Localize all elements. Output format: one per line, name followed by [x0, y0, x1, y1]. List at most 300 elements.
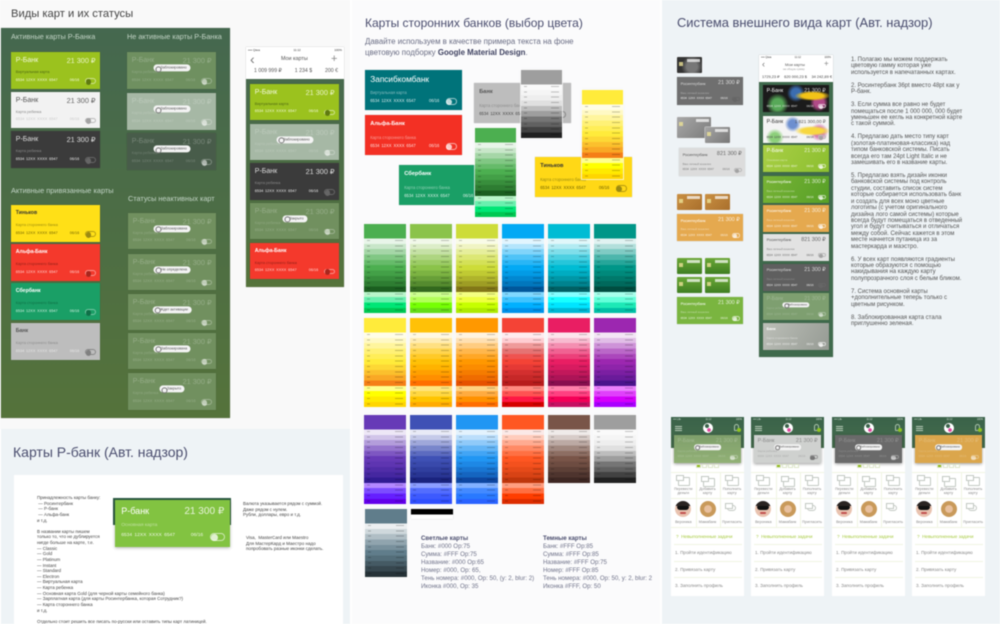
label: inactive statuses: Статусы неактивных карт — [128, 194, 215, 203]
card: generic bank: 6534 12XX XXXX 6547 — [479, 111, 525, 116]
card: main R-bank — [115, 500, 230, 547]
label: top up: карту — [807, 491, 817, 495]
text: numbered notes: полупрозрачного слоя с белым бликом. — [851, 276, 961, 282]
card: Sberbank: 06/16 — [463, 193, 473, 198]
totals — [762, 74, 832, 79]
text: dark cards spec: Иконка #FFF, Op: 50 — [543, 583, 601, 590]
card: blocked dark: 6534 12XX XXXX 6547 — [132, 159, 174, 163]
icon: invite — [727, 505, 736, 511]
card: Tinkoff — [535, 157, 632, 197]
card: status blocked: Заблокирована — [161, 226, 187, 230]
swatch: orange — [456, 318, 498, 407]
text: numbered notes: 7. Система основной карты — [851, 289, 928, 295]
card: black art: 06/16 — [807, 104, 814, 108]
swatch: purple — [594, 318, 636, 407]
card: status blocked 2: Карта ребенка — [133, 351, 158, 355]
card: status closed: Закрыто — [167, 387, 181, 391]
label: linked cards: Активные привязанные карты — [11, 186, 114, 195]
text: currency note — [242, 501, 322, 518]
action grid — [832, 472, 905, 528]
card: gold Rosinterbank — [763, 205, 829, 232]
label: transfer — [914, 487, 934, 495]
text: light cards spec: Банк: #000 Op:75 — [421, 543, 470, 550]
swatch: grey — [594, 415, 636, 483]
card: lime: 6534 12XX XXXX 6547 — [255, 109, 297, 113]
card: active lime: 21 300 ₽ — [67, 56, 96, 65]
text: card naming rules: — Карта ребенка — [37, 585, 73, 590]
swatch: light blue — [502, 224, 544, 313]
header — [912, 417, 985, 448]
card: status undefined: 21 300 ₽ — [183, 258, 212, 267]
card: lime: Виртуальная карта — [255, 102, 288, 106]
card: Alfa: Альфа-Банк — [16, 249, 48, 255]
card: blocked dark: Карта ребенка — [132, 151, 157, 155]
card: generic bank: Банк — [16, 328, 28, 334]
icon: add card — [783, 478, 795, 487]
text: light cards spec: Номер: #000, Op: 65, — [421, 567, 481, 574]
label: add card: карту — [944, 491, 953, 495]
status bar: 11:12 — [293, 48, 301, 52]
card: 06/16 — [959, 454, 966, 458]
text: card naming rules: — Карта стороннего банка — [37, 602, 93, 607]
card: gold Rosinterbank: 6534 12XX XXXX 6547 — [681, 233, 712, 237]
back chevron: ‹ — [762, 59, 765, 69]
label: Veronika: Вероника — [755, 520, 772, 524]
swatch grid: material palettes — [363, 223, 637, 578]
card: light grey: Росинтербанк — [767, 238, 791, 242]
header: 100% — [897, 418, 903, 420]
header: •••• Life — [753, 418, 761, 420]
text: numbered notes: уменьшен ее кегль на конкретной карте — [851, 115, 962, 121]
label: top up: Пополнить — [723, 487, 741, 491]
card: Карта ребенка — [758, 449, 777, 453]
card: Sberbank — [399, 165, 496, 205]
card: closed: Карта ребенка — [255, 221, 280, 225]
text: light cards spec: Тень номера: #000, Op: 50, (y: 2, blur: 2) — [421, 575, 534, 582]
card: active dark: 06/16 — [70, 157, 79, 161]
card: 6534 12XX XXXX 6547 — [758, 454, 789, 458]
card: status blocked 2: 06/16 — [186, 358, 196, 362]
card: Zapsibkombank: Запсибкомбанк — [370, 75, 429, 84]
card: dark — [250, 163, 339, 200]
panel: card appearance system — [662, 0, 1000, 624]
header: 100% — [736, 418, 742, 420]
card: Заблокировано — [699, 445, 719, 449]
label: Mamabank: Мамабанк — [860, 520, 877, 524]
text: dark cards spec: Сумма: #FFF Op:85 — [543, 551, 599, 558]
text: dark cards spec: Название: #FFF Op:75 — [543, 559, 607, 566]
card: Alfa: 6534 12XX XXXX 6547 — [255, 268, 297, 272]
card: light grey Rosinterbank: Росинтербанк — [683, 152, 708, 157]
text: currency note: Валюта указывается рядом с суммой. — [243, 501, 322, 506]
card: lime gradient: 21 300 ₽ — [804, 148, 826, 154]
text: numbered notes: мастеркарда и маэстро. — [851, 244, 918, 250]
card: green Rosinterbank: 6534 12XX XXXX 6547 — [767, 195, 797, 199]
card: dark grey: 21 300 ₽ — [804, 267, 826, 273]
label: add card: Добавить — [860, 487, 877, 491]
swatch: grey small — [521, 70, 562, 138]
card: blocked green: 06/16 — [186, 78, 195, 82]
card: Alfa — [11, 244, 100, 281]
phone header — [246, 47, 344, 79]
text: card naming rules: — Виртуальная карта — [37, 579, 83, 584]
card: blocked light: Заблокировано — [160, 107, 187, 111]
card: status blocked 2: 21 300 ₽ — [183, 337, 212, 346]
task 2: 2. Привязать карту — [836, 567, 876, 572]
card: Alfa — [365, 115, 462, 155]
icon: top up — [807, 477, 819, 486]
label: invite: Пригласить — [963, 520, 983, 524]
add button: + — [824, 59, 829, 68]
text: numbered notes: используется в напечатанных картах. — [851, 70, 956, 76]
label: top up: карту — [888, 491, 898, 495]
panel: R-bank cards — [1, 429, 350, 624]
text: numbered notes: студии, составить список систем — [851, 186, 942, 192]
label: add card: Добавить — [779, 487, 796, 491]
label: Veronika: Вероника — [836, 520, 853, 524]
icon: add card — [703, 478, 715, 487]
totals: 1729,23 ₽ — [762, 74, 780, 79]
card: gold Rosinterbank: 21 300 ₽ — [718, 217, 740, 223]
task 1: 1. Пройти идентификацию — [675, 550, 732, 555]
card: light grey Rosinterbank — [679, 148, 745, 176]
icon: transfer — [678, 477, 690, 486]
avatar: Veronika — [675, 501, 691, 517]
card: main R-bank: 06/16 — [191, 533, 203, 538]
card: light grey Rosinterbank: Ваш личный кошелек — [683, 162, 711, 166]
swatch: green small — [475, 128, 516, 217]
card: green Rosinterbank: 06/16 — [721, 316, 728, 320]
card: active white: 21 300 ₽ — [67, 96, 96, 105]
card: dark: Карта ребенка — [255, 181, 280, 185]
card: grey Rosinterbank: 06/16 — [721, 96, 728, 100]
card: blocked: 6534 12XX XXXX 6547 — [255, 149, 297, 153]
card: Zapsibkombank — [365, 70, 462, 110]
card: lime gradient: 6534 12XX XXXX 6547 — [767, 164, 797, 168]
tasks heading: ? Невыполненные задачи — [917, 534, 973, 539]
swatch: red — [502, 318, 544, 407]
card: green Rosinterbank: Росинтербанк — [681, 301, 706, 306]
card: black art: 21 300 ₽ — [804, 88, 826, 94]
card: active white: Карта ребенка — [16, 110, 41, 114]
card: 21 300 ₽ — [877, 438, 899, 444]
action grid — [671, 472, 744, 528]
card: Tinkoff — [11, 205, 100, 242]
label: add card: карту — [703, 491, 712, 495]
card: grey bank: 06/16 — [807, 342, 814, 346]
text: numbered notes: и создать для всех моно цветные — [851, 199, 944, 205]
header: 100% — [977, 418, 983, 420]
phone: home screen, gold card — [912, 417, 985, 596]
header: 11:12 — [785, 418, 791, 420]
card: status awaiting activation: Р-Банк — [133, 299, 155, 306]
card: white art: 06/16 — [807, 135, 814, 139]
card: active lime: Виртуальная карта — [16, 70, 49, 74]
totals: 1 009 999 ₽ — [254, 68, 282, 74]
label: top up: карту — [968, 491, 978, 495]
card: blocked light: 06/16 — [186, 119, 195, 123]
text: numbered notes: которые собирается использовать банк — [851, 192, 961, 198]
text: numbered notes — [850, 56, 962, 327]
text: dark cards spec: Банк: #FFF Op:85 — [543, 543, 593, 550]
card: status closed: 6534 12XX XXXX 6547 — [133, 399, 175, 403]
text: numbered notes: дизайна лого самой системы) которые — [851, 212, 959, 218]
card: generic bank: 6534 12XX XXXX 6547 — [16, 349, 58, 353]
card: main R-bank: 6534 12XX XXXX 6547 — [121, 533, 175, 538]
text: numbered notes: логотипы (с учетом оригинального — [851, 205, 947, 211]
text: card naming rules: — Classic — [37, 546, 57, 551]
card: blocked: Карта ребенка — [767, 306, 785, 310]
pager dots — [696, 464, 720, 468]
card: status awaiting activation — [128, 294, 216, 330]
text: numbered notes: типом банковской системы. Писать — [851, 147, 950, 153]
swatch: deep purple — [364, 415, 406, 504]
label: top up — [964, 487, 982, 496]
card: blocked — [763, 293, 829, 320]
header — [751, 417, 824, 448]
label: add card — [698, 486, 716, 496]
card: blocked: 21 300 ₽ — [306, 128, 335, 137]
card: generic bank — [11, 323, 100, 360]
card: dark: 21 300 ₽ — [306, 167, 335, 176]
header: 100% — [816, 418, 822, 420]
card: Alfa: 6534 12XX XXXX 6547 — [16, 270, 58, 274]
card: blocked: Р-Банк — [767, 296, 783, 302]
intro text: цветовую подборку Google Material Design. — [365, 48, 528, 56]
card: status closed — [128, 373, 216, 410]
card: Sberbank: 6534 12XX XXXX 6547 — [16, 309, 58, 313]
card: blocked: Заблокировано — [283, 137, 310, 141]
card: blocked green: Карта ребенка — [132, 70, 157, 74]
action grid — [912, 472, 985, 528]
swatch: cyan — [548, 224, 590, 313]
card: blocked: 6534 12XX XXXX 6547 — [767, 312, 797, 316]
card: gold Rosinterbank: Росинтербанк — [681, 218, 706, 223]
card: Tinkoff: Тиньков — [16, 210, 37, 216]
card: status undefined: Карта ребенка — [133, 272, 158, 276]
task 1: 1. Пройти идентификацию — [836, 550, 893, 555]
card: gold Rosinterbank: 06/16 — [721, 233, 728, 237]
card: 21 300 ₽ — [957, 438, 979, 444]
card: 06/16 — [798, 454, 805, 458]
swatch: green — [364, 224, 406, 313]
icon: top up — [888, 477, 900, 486]
card: blocked green: 6534 12XX XXXX 6547 — [132, 78, 174, 82]
label: transfer: Перевести — [754, 487, 772, 491]
card: grey Rosinterbank: Росинтербанк — [681, 81, 706, 86]
bank card gold 2 — [705, 194, 730, 210]
card: black art: Р-Банк — [767, 88, 783, 94]
mini card: black — [677, 57, 702, 73]
screen title: Мои карты — [785, 62, 805, 67]
label: transfer: деньги — [678, 491, 689, 495]
text: light cards spec: Название: #000 Op:65 — [421, 559, 484, 566]
card: status awaiting activation: Ждет активации — [160, 307, 188, 311]
card: status closed: Р-Банк — [133, 378, 155, 385]
text: numbered notes: цветовую гамму которая уже — [851, 63, 931, 69]
card: grey bank: 6534 12XX XXXX 6547 — [767, 342, 797, 346]
card: Карта ребенка — [919, 449, 938, 453]
card: status closed: Карта ребенка — [133, 391, 158, 395]
card: blocked: 06/16 — [807, 312, 814, 316]
text: card naming rules: — Росинтербанк — [38, 501, 73, 506]
tasks list — [915, 534, 983, 588]
card: active lime: Р-Банк — [16, 57, 38, 64]
label: active cards: Активные карты Р-Банка — [11, 32, 95, 41]
card: lime: 21 300 ₽ — [306, 88, 335, 97]
card: Tinkoff: 6534 12XX XXXX 6547 — [540, 185, 586, 190]
text: card naming rules: — Standard — [37, 568, 61, 573]
icon: invite — [807, 505, 816, 511]
card — [674, 435, 741, 463]
card: Sberbank: Карта стороннего банка — [16, 301, 58, 305]
card: Р-Банк — [678, 438, 694, 444]
status bar: 100% — [824, 56, 831, 59]
icon: transfer — [839, 477, 851, 486]
card: black art — [763, 85, 829, 112]
label: inactive cards: Не активные карты Р-Банка — [127, 32, 222, 41]
text: numbered notes: 4. Предлагаю дать место типу карт — [851, 134, 949, 140]
card: dark grey: 06/16 — [807, 283, 814, 287]
card: light grey: 821 300 ₽ — [801, 237, 826, 243]
card — [754, 435, 821, 463]
avatar: Mamabank — [941, 501, 957, 517]
back chevron: ‹ — [250, 51, 255, 67]
text: numbered notes: помещаться после 1 000 000, 000 будет — [851, 108, 962, 114]
card: Alfa: Альфа-Банк — [370, 121, 405, 127]
card: light grey — [763, 234, 829, 261]
card: dark: 06/16 — [309, 189, 318, 193]
label: top up: Пополнить — [884, 487, 902, 491]
swatch: yellow small — [582, 90, 623, 179]
text: numbered notes: которые образуются с помощью — [851, 263, 941, 269]
card: status blocked — [128, 213, 216, 249]
card: generic bank: 06/16 — [538, 111, 548, 116]
card: status undefined: Не определена — [161, 267, 187, 271]
card: Р-Банк — [839, 438, 855, 444]
text: dark cards spec: Темные карты — [543, 535, 587, 542]
label: transfer: деньги — [838, 491, 850, 495]
card: blocked light: 6534 12XX XXXX 6547 — [132, 119, 174, 123]
card: Alfa: Карта стороннего банка — [370, 135, 416, 140]
card: main R-bank: Основная карта — [121, 523, 157, 528]
card: grey Rosinterbank: Ваш личный кошелек — [681, 91, 709, 95]
task 2: 2. Привязать карту — [675, 567, 715, 572]
card: status undefined — [128, 254, 216, 290]
totals — [254, 67, 338, 74]
bank card grey small — [705, 127, 730, 143]
task 3: 3. Заполнить профиль — [916, 583, 964, 588]
card: lime gradient — [763, 145, 829, 172]
tasks heading: ? Невыполненные задачи — [676, 534, 732, 539]
card: blocked green — [127, 52, 216, 89]
tasks list — [754, 534, 822, 588]
card: 06/16 — [718, 454, 725, 458]
card: white art: 1 821 300,00 ₽ — [795, 119, 826, 124]
text: numbered notes: всегда будут помещаться в отведенный — [851, 218, 962, 224]
swatch: blue grey — [365, 509, 407, 577]
card: closed: Закрыто — [289, 216, 304, 220]
text: numbered notes: замешивать его в название карты. — [851, 160, 947, 166]
text: numbered notes: +дополнительные теперь только с — [851, 295, 947, 301]
card: Заблокировано — [779, 445, 799, 449]
text: card naming rules: Отдельно стоит решить все писать по-русски или оставить типы карт латиницей. — [37, 619, 207, 624]
card: gold Rosinterbank: 6534 12XX XXXX 6547 — [767, 224, 797, 228]
label: top up: карту — [727, 491, 737, 495]
card: Р-Банк — [919, 438, 935, 444]
card: Alfa: 06/16 — [70, 270, 79, 274]
icon: top up — [968, 477, 980, 486]
label: add card: Добавить — [940, 487, 957, 491]
heading: Карты Р-банк (Авт. надзор) — [13, 444, 188, 460]
card: status blocked: Р-Банк — [133, 218, 155, 225]
card: blocked green: 21 300 ₽ — [183, 56, 212, 65]
card: green Rosinterbank: Росинтербанк — [767, 180, 791, 184]
card: white art: Р-Банк — [767, 119, 783, 125]
label: transfer — [754, 487, 773, 495]
card: dark grey: Росинтербанк — [767, 268, 791, 272]
text: currency note: Даже рядом с нулем. — [243, 507, 287, 512]
card: green Rosinterbank — [677, 297, 743, 324]
text: numbered notes: угол и будут считываться и отличаться — [851, 224, 959, 230]
text: dark cards spec: Тень номера: #000, Op: 50, y: 2, blur: 2 — [543, 575, 652, 582]
label: top up — [884, 487, 902, 496]
card: status awaiting activation: 06/16 — [186, 319, 196, 323]
card: Alfa: Карта стороннего банка — [16, 262, 58, 266]
card: blocked: Карта ребенка — [255, 142, 280, 146]
icon: transfer — [919, 477, 931, 486]
text: card naming rules: и т.д. — [37, 608, 47, 612]
card: blocked light: 21 300 ₽ — [183, 97, 212, 106]
text: numbered notes: 3. Если сумма все равно не будет — [851, 102, 945, 108]
card: blocked — [250, 124, 339, 160]
card: closed: 06/16 — [309, 228, 318, 232]
text: dark cards spec: Номер: #FFF Op:85 — [543, 567, 598, 574]
card: light grey Rosinterbank: 6534 12XX XXXX 6547 — [683, 167, 714, 171]
card: active white: 06/16 — [70, 117, 79, 121]
card: active lime: 06/16 — [70, 78, 79, 82]
icon: transfer — [758, 477, 770, 486]
card: status closed: 06/16 — [186, 399, 196, 403]
status bar — [760, 56, 832, 59]
card: Zapsibkombank: Виртуальная карта — [370, 90, 407, 95]
avatar: Veronika — [916, 501, 932, 517]
card: status awaiting activation: 21 300 ₽ — [183, 298, 212, 307]
text: numbered notes: 8. Заблокированная карта стала — [851, 314, 942, 320]
card: Карта ребенка — [678, 449, 697, 453]
card: blocked dark: 21 300 ₽ — [183, 137, 212, 146]
text: numbered notes: 2. Росинтербанк 36pt вместо 48pt как у — [851, 83, 959, 89]
swatch: deep orange — [502, 415, 544, 504]
label: transfer: Перевести — [835, 487, 853, 491]
heading: Система внешнего вида карт (Авт. надзор) — [677, 15, 933, 30]
text: card naming rules: — Instant — [37, 562, 56, 568]
card: green Rosinterbank: Ваш личный кошелек — [767, 189, 794, 193]
icon: invite — [968, 505, 977, 511]
card: light grey: 6534 12XX XXXX 6547 — [767, 253, 797, 257]
card: active white: Р-Банк — [16, 97, 38, 104]
card: light grey: Ваш личный кошелек — [767, 247, 794, 251]
tasks heading: ? Невыполненные задачи — [837, 534, 893, 539]
card: grey bank — [763, 323, 829, 350]
intro text: Давайте используем в качестве примера текста на фоне — [365, 37, 574, 46]
label: transfer — [674, 487, 693, 495]
card: Заблокировано — [940, 445, 960, 449]
card: grey bank: Банк — [767, 327, 776, 331]
card: green Rosinterbank: 6534 12XX XXXX 6547 — [681, 316, 712, 320]
status bar: 100% — [334, 48, 342, 52]
swatch: pink — [548, 318, 590, 407]
